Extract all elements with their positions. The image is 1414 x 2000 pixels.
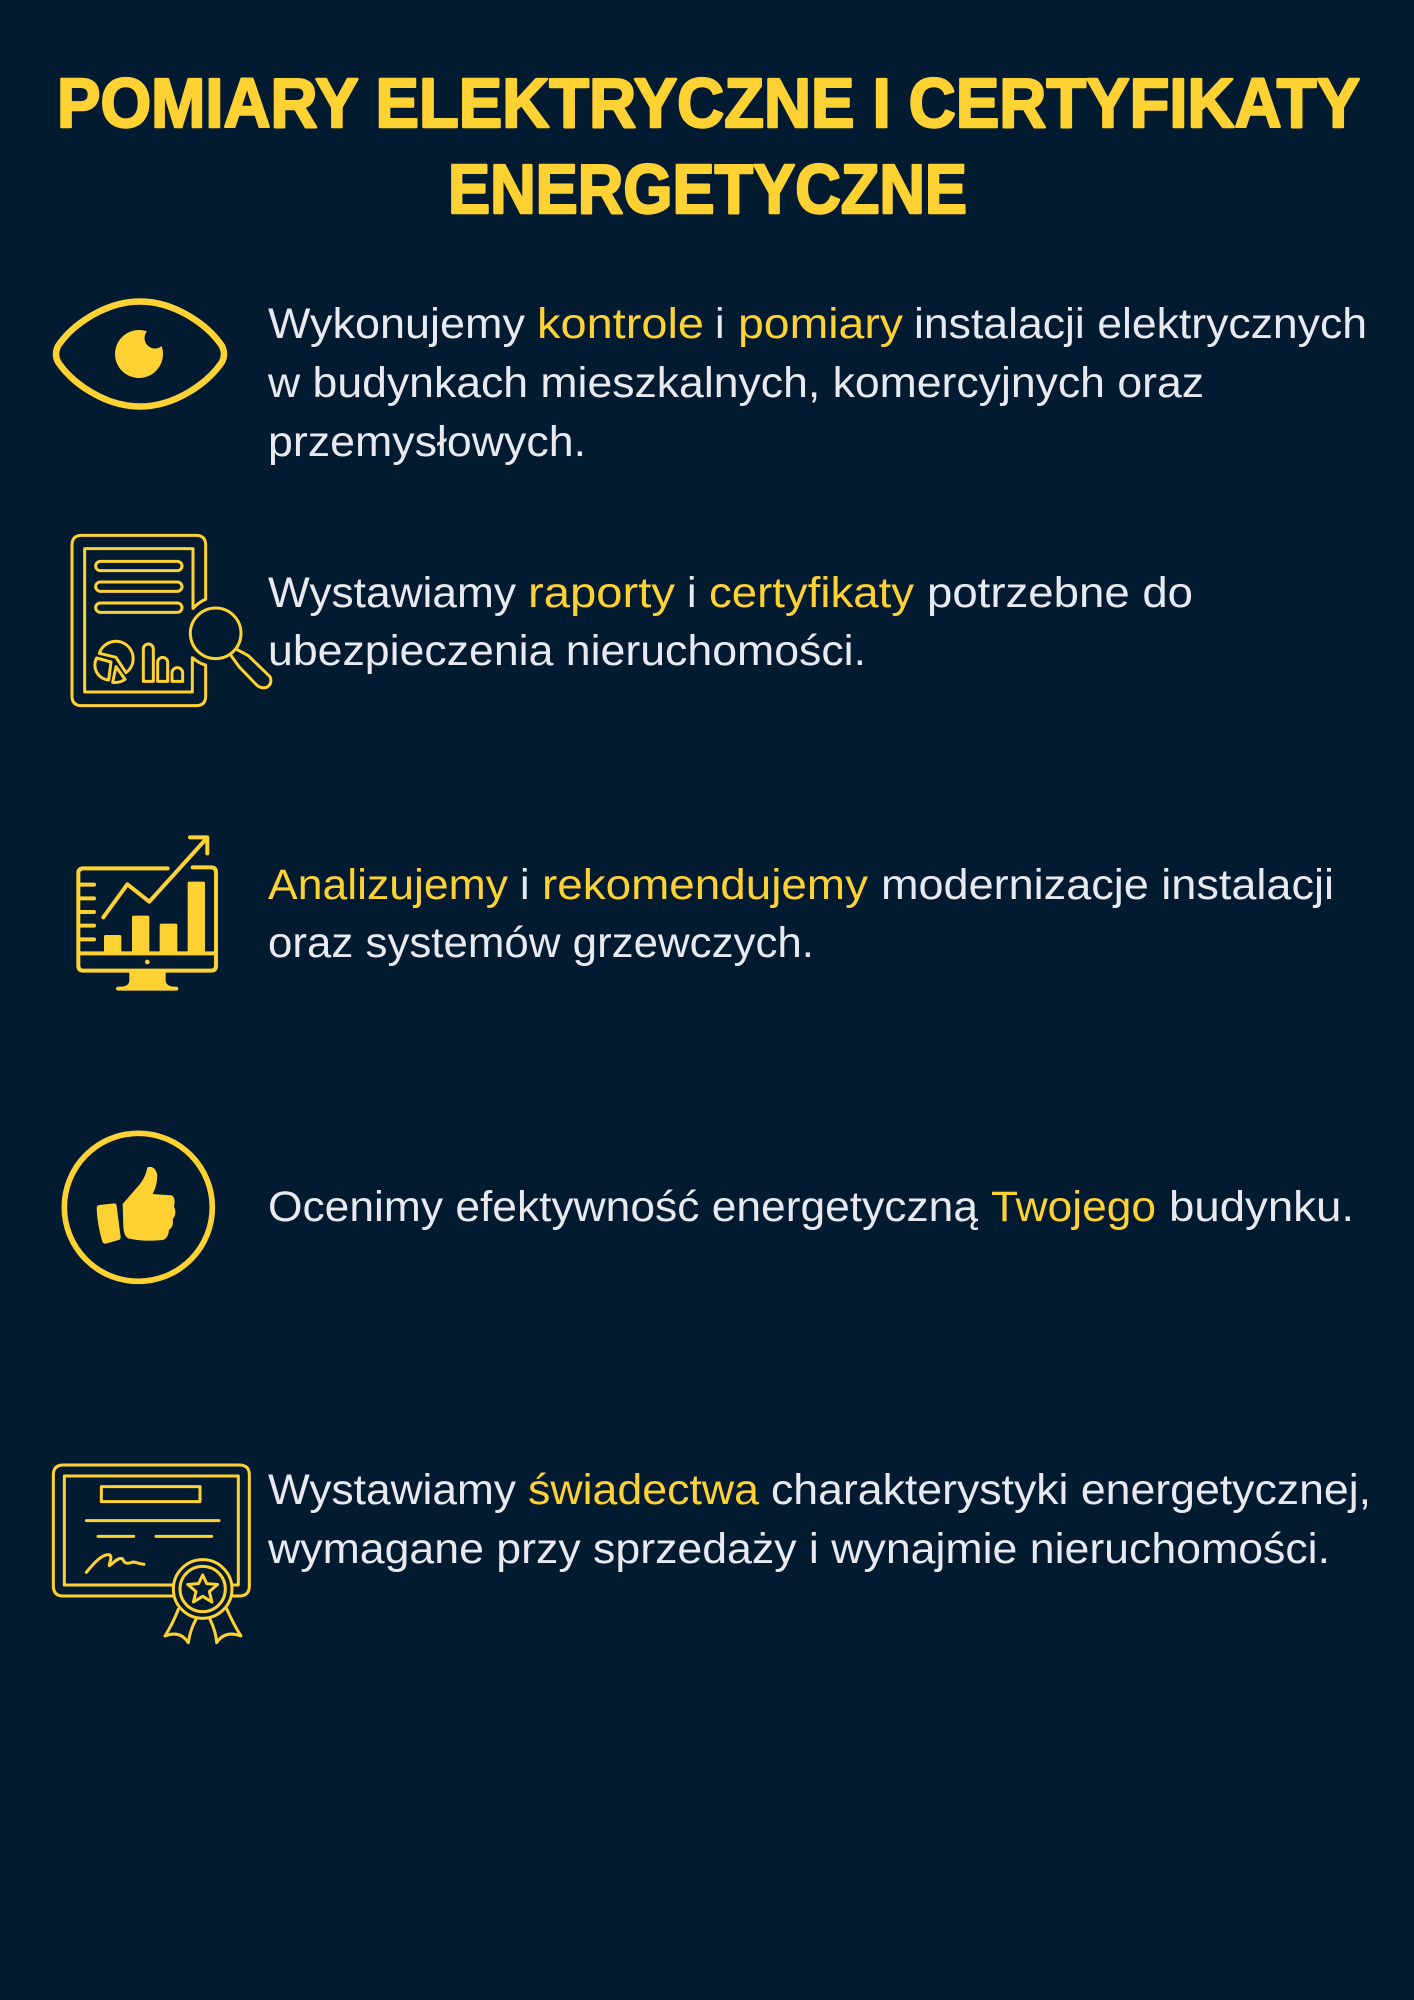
text: efektywność energetyczna: budynku.: [1169, 1183, 1354, 1231]
icon: report with magnifier: [72, 535, 271, 706]
text: raporty i certyfikaty: Wystawiamy: [268, 569, 517, 617]
text: analiza i rekomendacje: [268, 861, 1334, 967]
text: raporty i certyfikaty: [268, 569, 1193, 675]
text: kontrole i pomiary: Wykonujemy: [268, 300, 526, 348]
text: kontrole i pomiary: kontrole: [537, 300, 704, 348]
panel: kontrole i pomiary: [56, 300, 1367, 466]
text: kontrole i pomiary: i: [715, 300, 725, 348]
text: kontrole i pomiary: instalacji elektrycznych: [914, 300, 1367, 348]
icon: certificate with medal: [53, 1465, 249, 1643]
icon: thumbs up in circle: [64, 1133, 212, 1281]
text: kontrole i pomiary: pomiary: [738, 300, 904, 348]
text: raporty i certyfikaty: i: [687, 569, 697, 617]
text: świadectwa: wymagane przy sprzedaży i wynajmie nieruchomości.: [267, 1525, 1330, 1573]
text: świadectwa: charakterystyki energetycznej,: [771, 1466, 1371, 1514]
text: analiza i rekomendacje: oraz systemów grzewczych.: [268, 919, 814, 967]
panel: świadectwa: [53, 1465, 1371, 1643]
text: kontrole i pomiary: [267, 300, 1367, 466]
text: świadectwa: [267, 1466, 1371, 1573]
text: analiza i rekomendacje: modernizacje instalacji: [881, 861, 1334, 909]
icon: eye: [56, 302, 224, 406]
text: analiza i rekomendacje: rekomendujemy: [542, 861, 869, 909]
text: analiza i rekomendacje: i: [520, 861, 530, 909]
title: [57, 64, 1360, 228]
text: raporty i certyfikaty: ubezpieczenia nieruchomości.: [268, 627, 866, 675]
text: raporty i certyfikaty: certyfikaty: [709, 569, 915, 617]
text: efektywność energetyczna: [268, 1183, 1354, 1231]
text: świadectwa: Wystawiamy: [268, 1466, 517, 1514]
text: świadectwa: świadectwa: [528, 1466, 759, 1514]
text: raporty i certyfikaty: potrzebne do: [927, 569, 1193, 617]
panel: raporty i certyfikaty: [72, 535, 1193, 706]
text: raporty i certyfikaty: raporty: [528, 569, 676, 617]
text: efektywność energetyczna: Twojego: [991, 1183, 1156, 1231]
text: efektywność energetyczna: Ocenimy efektywność energetyczną: [268, 1183, 978, 1231]
text: kontrole i pomiary: w budynkach mieszkalnych, komercyjnych oraz: [267, 359, 1204, 407]
panel: analiza i rekomendacje: [78, 837, 1334, 991]
icon: monitor with growth chart: [78, 837, 216, 991]
text: analiza i rekomendacje: Analizujemy: [268, 861, 509, 909]
title: ENERGETYCZNE: [448, 150, 967, 228]
panel: efektywność energetyczna: [64, 1133, 1354, 1281]
text: kontrole i pomiary: przemysłowych.: [268, 418, 586, 466]
